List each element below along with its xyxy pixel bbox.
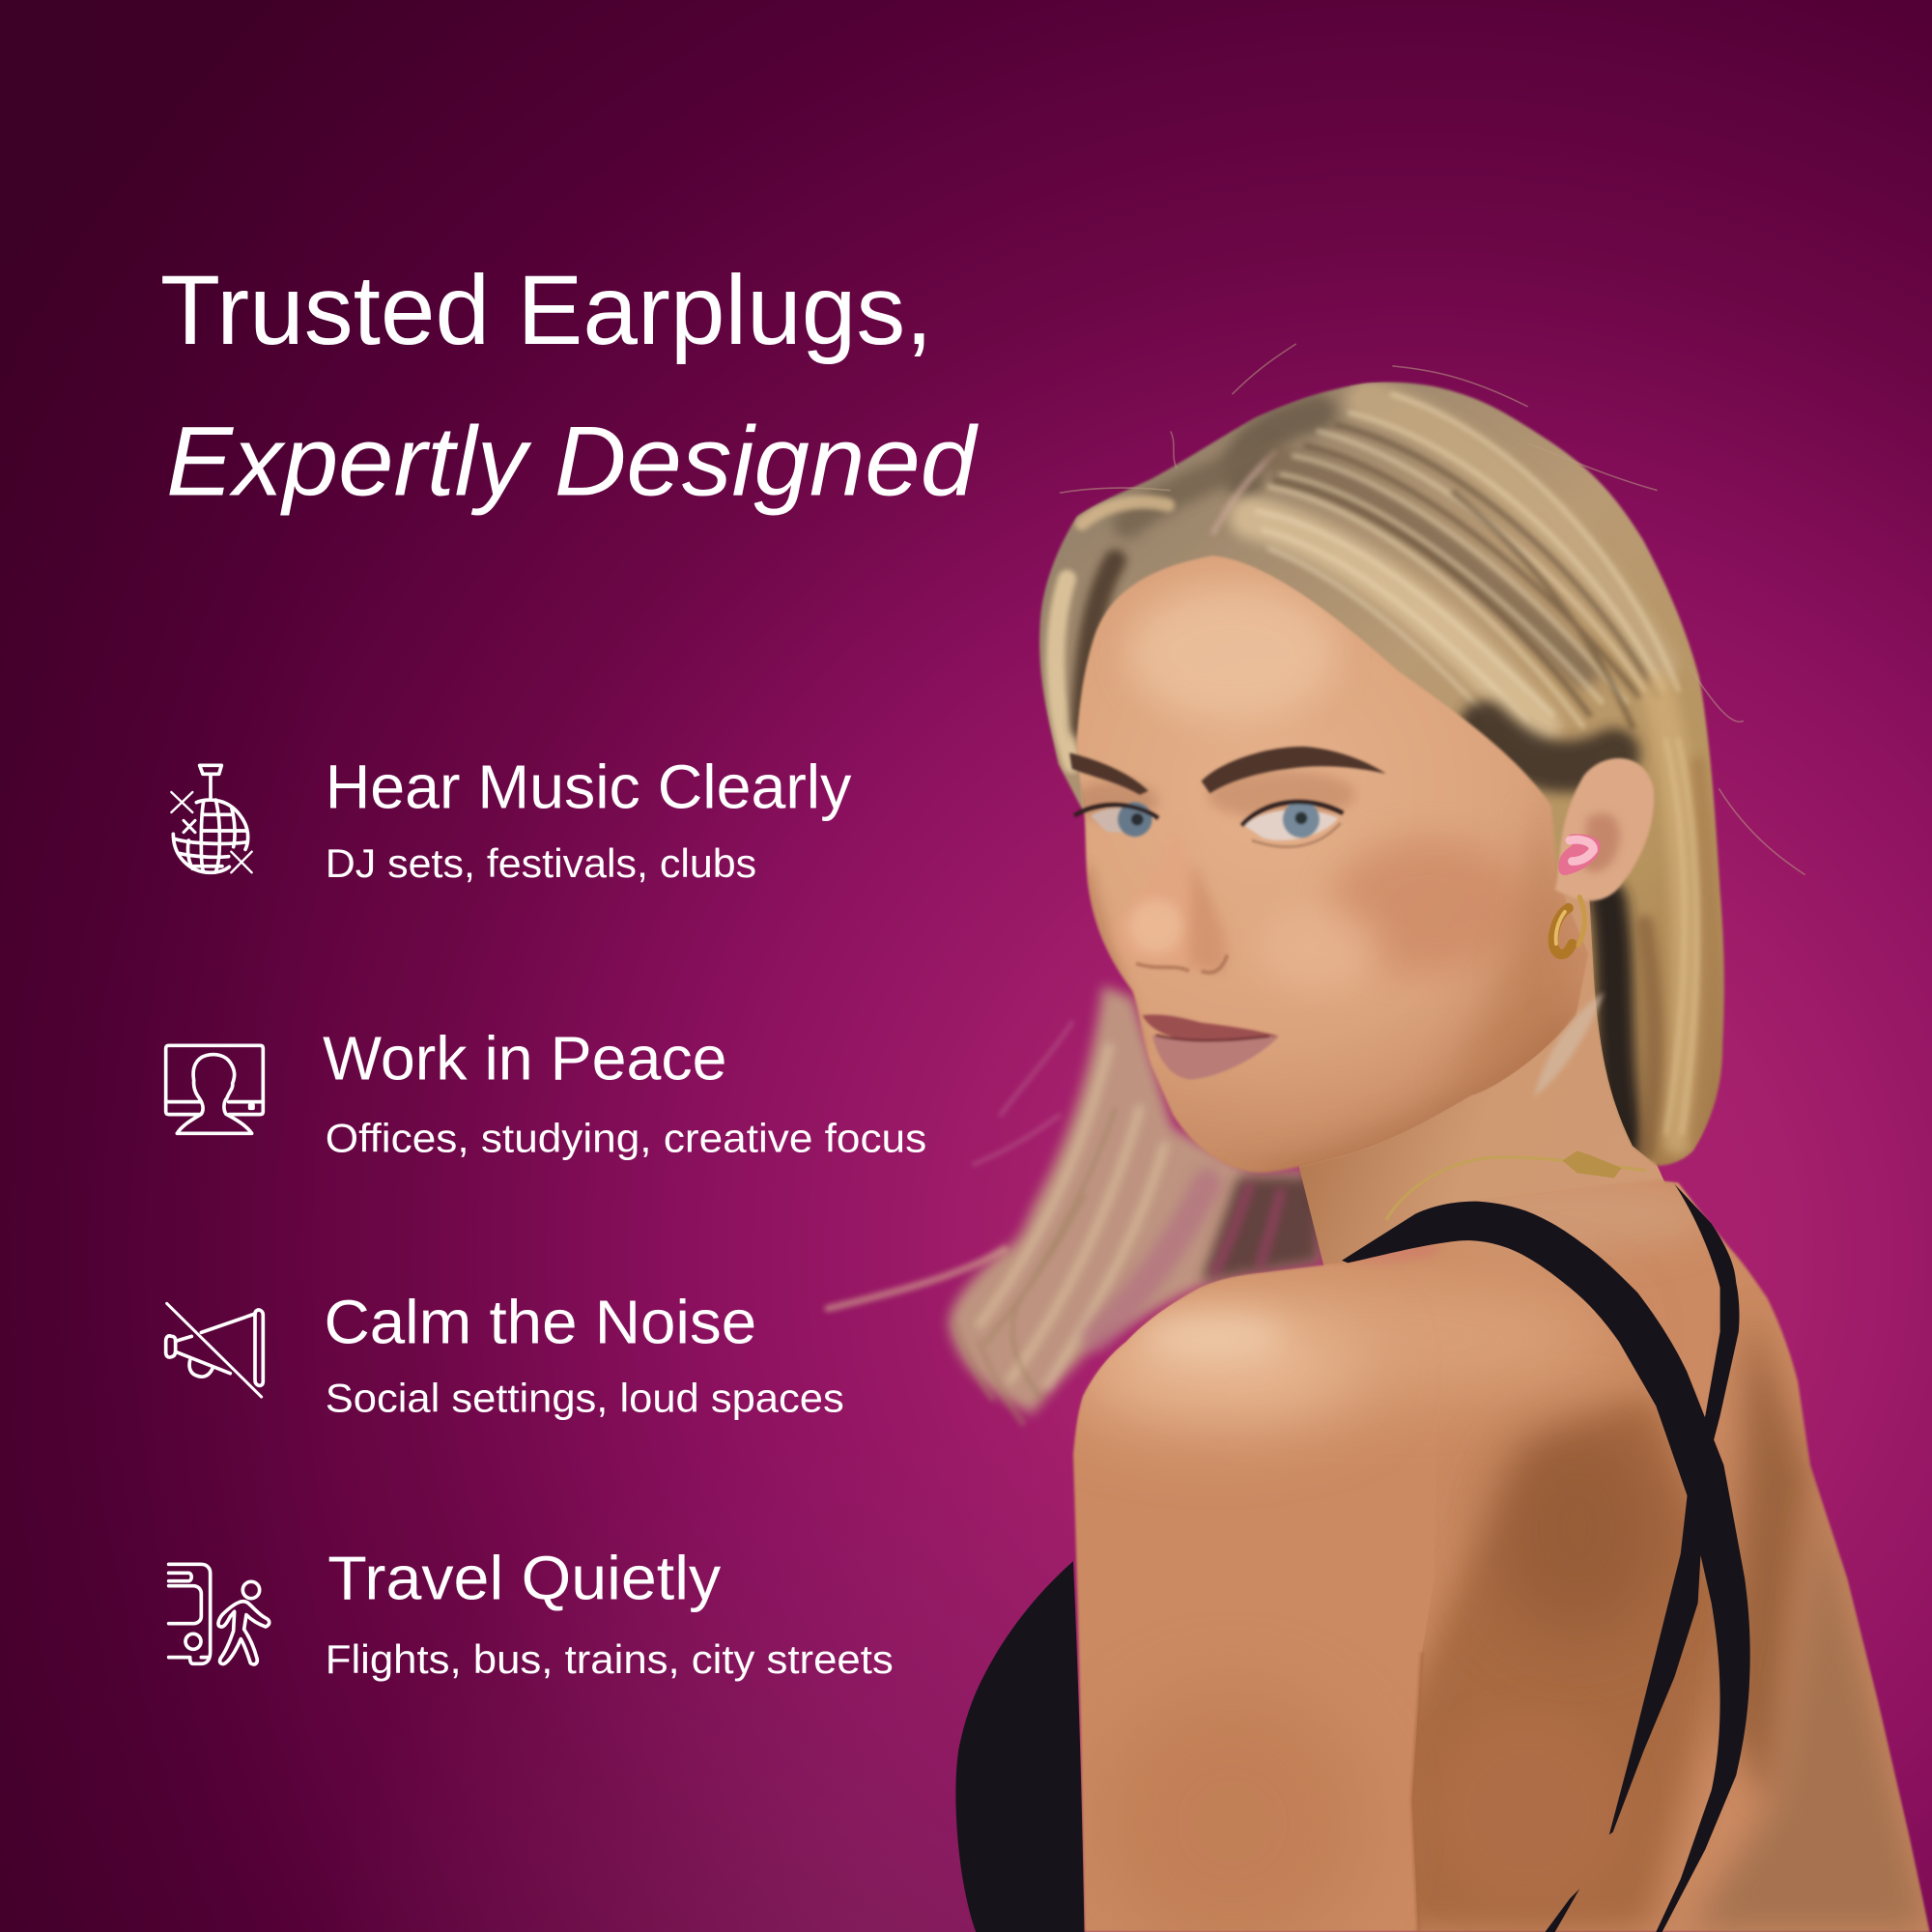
root shadow: [1242, 412, 1319, 480]
item: calm the noise: [166, 1287, 844, 1421]
pink earplug: [1558, 834, 1601, 875]
face: [1072, 555, 1589, 1202]
item: work in peace: [166, 1023, 926, 1161]
heading: hear music clearly: Hear Music Clearly: [326, 753, 851, 822]
dark above ear: [1485, 727, 1614, 767]
photo: woman with earplug: [828, 344, 1932, 1932]
arm lower tone: [1121, 1712, 1344, 1932]
left eye: [1074, 802, 1158, 837]
shoulder and back skin: [1065, 1177, 1932, 1932]
neck strand of hair: [1534, 992, 1605, 1096]
subtext: offices: Offices, studying, creative focus: [326, 1116, 926, 1161]
left strands: [1056, 579, 1072, 764]
title: [160, 255, 979, 517]
icon: muted megaphone: [166, 1303, 263, 1397]
dark behind ear: [1608, 899, 1627, 1146]
lips: [1142, 1014, 1279, 1079]
main hair: [1039, 383, 1724, 1166]
heading: travel quietly: Travel Quietly: [327, 1544, 721, 1613]
subtext: flights: Flights, bus, trains, city streets: [326, 1636, 894, 1682]
right eye: [1242, 801, 1343, 847]
icon: disco ball: [171, 765, 252, 872]
nose: [1117, 826, 1229, 973]
gold necklace: [1386, 1151, 1646, 1220]
black crossing straps: [1342, 1184, 1750, 1932]
eyebrows: [1069, 747, 1386, 795]
ear: [1555, 758, 1654, 900]
flying back hair: [828, 985, 1321, 1423]
gold earrings: [1553, 897, 1584, 954]
black top front: [955, 1561, 1084, 1932]
subtext: DJ sets: DJ sets, festivals, clubs: [326, 840, 756, 886]
item: hear music clearly: [171, 753, 851, 886]
loose hair wisps: [1060, 344, 1805, 875]
subtext: social settings: Social settings, loud spaces: [326, 1376, 844, 1421]
title: Expertly Designed: [166, 407, 979, 517]
right lock: [1658, 690, 1688, 1140]
title: Trusted Earplugs,: [160, 255, 933, 365]
heading: work in peace: Work in Peace: [323, 1023, 727, 1093]
item: travel quietly: [169, 1544, 894, 1682]
icon: person at monitor: [166, 1045, 263, 1133]
icon: bus and pedestrian: [169, 1564, 270, 1664]
heading: calm the noise: Calm the Noise: [324, 1287, 756, 1356]
fine strands: [1269, 394, 1678, 727]
back shading: [1392, 1306, 1932, 1932]
upper shoulder tone: [1146, 1275, 1614, 1399]
broad highlights and lowlights: [1251, 518, 1540, 727]
neck: [1293, 887, 1668, 1269]
